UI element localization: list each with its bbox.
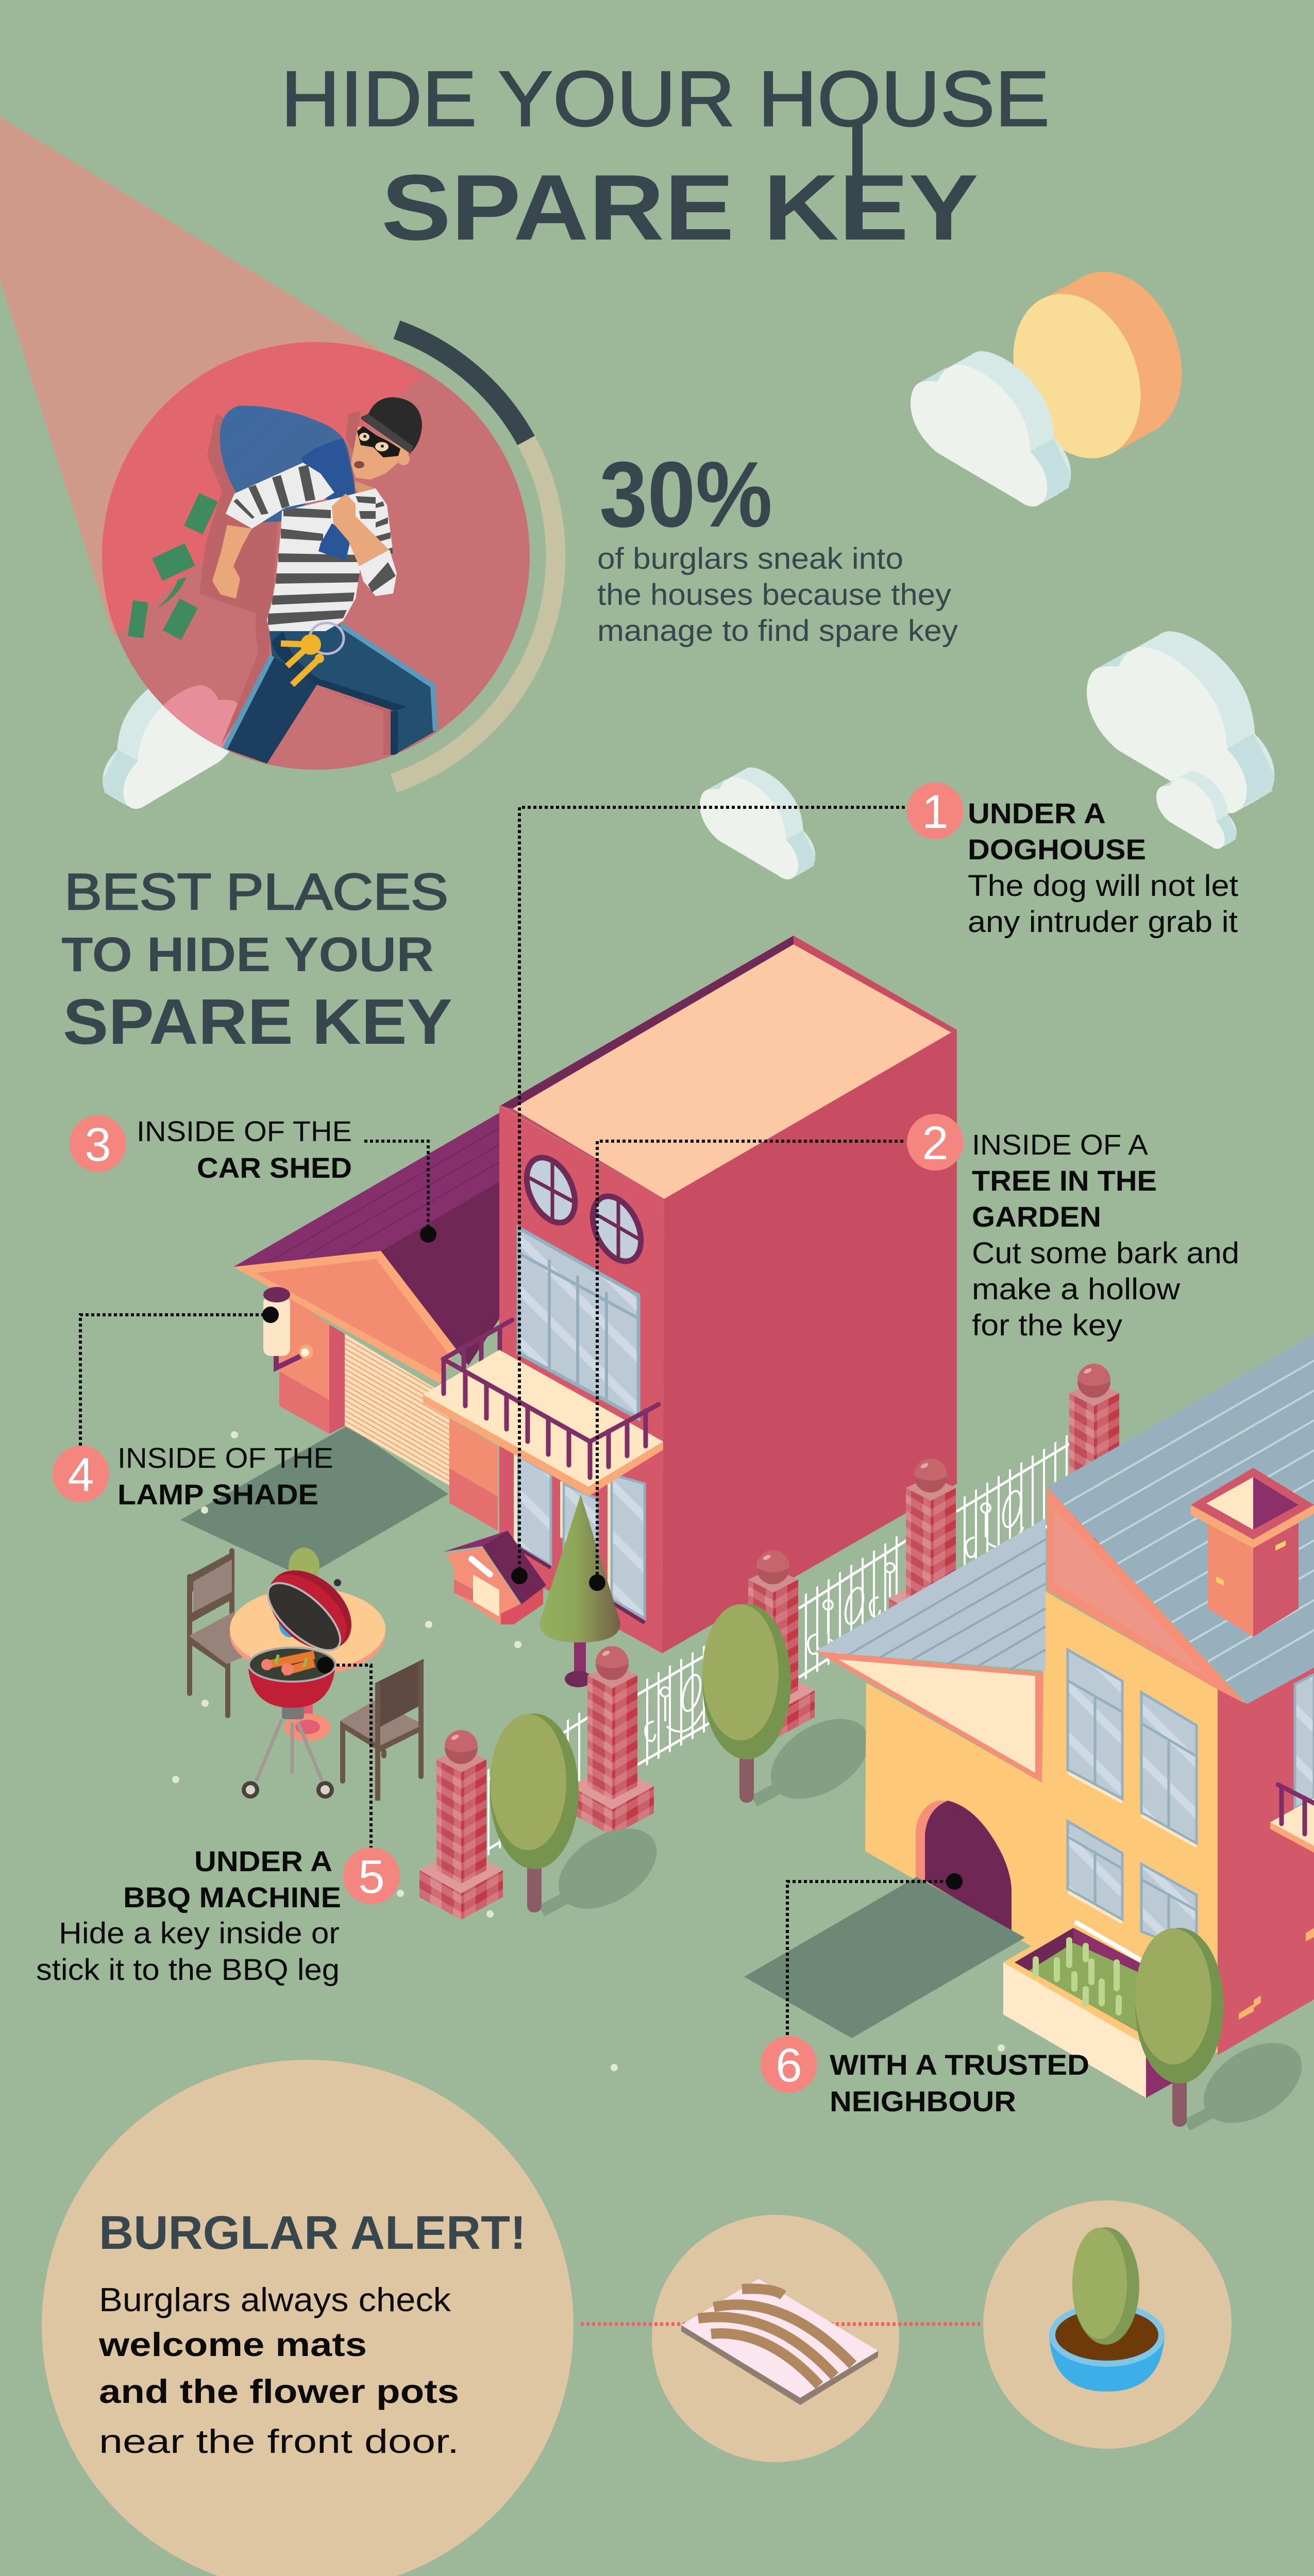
- label 2: tree: make a hollow: [972, 1273, 1181, 1306]
- label 1: doghouse: The dog will not let: [968, 869, 1238, 903]
- left arm: [212, 525, 252, 599]
- spotlight beam: [0, 117, 423, 636]
- statistic: 30 percent: manage to find spare key: [597, 614, 958, 648]
- bbq collar: [282, 1706, 304, 1719]
- shed pillar: [329, 1325, 345, 1434]
- yellow wall: [865, 1590, 1218, 2053]
- bbq bowl: [248, 1669, 335, 1708]
- label 2: tree: Cut some bark and: [972, 1236, 1239, 1270]
- pink gable: [1047, 1487, 1245, 1704]
- title: [281, 55, 1050, 260]
- bbq area: [187, 1548, 424, 1801]
- tree 2: [702, 1604, 883, 1816]
- label 3: car shed: 3: [85, 1118, 111, 1171]
- bbq wheels: [242, 1781, 334, 1799]
- label 2: tree: 2: [922, 1117, 949, 1170]
- sack neck shade: [301, 438, 356, 510]
- statistic: 30 percent: [597, 443, 958, 648]
- lower windows: [514, 1453, 645, 1623]
- left chair: [187, 1551, 242, 1716]
- label 1: doghouse: 1: [922, 786, 949, 838]
- brick post 5: [1052, 1364, 1136, 1553]
- chimney: [1191, 1468, 1314, 1637]
- sack strap: [318, 523, 352, 561]
- big pink house: [423, 936, 957, 1653]
- doorstep mat shadow: [744, 1877, 1025, 2038]
- door: [916, 1801, 1012, 1932]
- striped shirt: [267, 488, 393, 631]
- label 3: car shed: CAR SHED: [197, 1151, 352, 1184]
- label 3: car shed: [70, 1115, 352, 1184]
- heading: best places: BEST PLACES: [64, 863, 448, 920]
- window 5: [1295, 1674, 1314, 1808]
- label 4: lamp shade: [53, 1442, 333, 1511]
- cloud: under burglar circle: [103, 673, 242, 809]
- connector 1: [511, 807, 905, 1584]
- brick post 3: [731, 1550, 815, 1740]
- big blue roof: [1047, 1334, 1314, 1704]
- alert text: [98, 2281, 459, 2460]
- head: [351, 397, 422, 493]
- roof edge: [500, 936, 957, 1199]
- cloud: near sun: [911, 351, 1071, 506]
- shed roof: [233, 1113, 499, 1267]
- round window 2: [583, 1189, 650, 1269]
- brick post 4: [889, 1459, 972, 1648]
- window 2: [1141, 1692, 1197, 1846]
- fence: [487, 1432, 1072, 1856]
- label 1: doghouse: UNDER A: [968, 797, 1106, 829]
- keys: [281, 623, 344, 685]
- label 1: doghouse: [907, 783, 1238, 939]
- alert heading: BURGLAR ALERT!: [99, 2207, 526, 2259]
- label 1: doghouse: DOGHOUSE: [968, 833, 1146, 866]
- roof: [513, 944, 951, 1199]
- label 6: neighbour: [761, 2036, 1089, 2117]
- bbq legs: [256, 1719, 322, 1781]
- statistic: 30 percent: the houses because they: [597, 578, 951, 612]
- dotted link line: [581, 2323, 980, 2326]
- burglar figure: [128, 397, 435, 764]
- connector 5: [317, 1657, 371, 1849]
- label 3: car shed: INSIDE OF THE: [137, 1115, 352, 1147]
- alert text: near the front door.: [99, 2422, 459, 2460]
- decorative bricks: [1239, 1928, 1314, 2020]
- left wall: [499, 1106, 664, 1653]
- small ground dots: [172, 1431, 1005, 2071]
- small gable: [815, 1651, 1043, 1783]
- heading: best places: TO HIDE YOUR: [61, 927, 434, 982]
- label 5: bbq: UNDER A: [194, 1845, 332, 1877]
- alert text: Burglars always check: [99, 2281, 451, 2318]
- cloud: right: [1087, 631, 1274, 813]
- panel: burglar alert: [42, 2060, 574, 2576]
- shed wall base: [279, 1371, 329, 1434]
- brick post 2: [570, 1646, 654, 1836]
- label 5: bbq: Hide a key inside or: [59, 1917, 340, 1950]
- heading: best places: [61, 863, 452, 1058]
- trousers: [225, 625, 435, 764]
- label 2: tree: TREE IN THE: [972, 1164, 1157, 1197]
- label 2: tree: INSIDE OF A: [972, 1128, 1149, 1161]
- tree 1: [490, 1714, 671, 1925]
- circle: flower pot backdrop: [983, 2200, 1232, 2449]
- bbq lid: [254, 1554, 367, 1666]
- label 4: lamp shade: INSIDE OF THE: [117, 1442, 333, 1474]
- planter box: [1003, 1922, 1173, 2098]
- round window 1: [517, 1150, 584, 1230]
- label 1: doghouse: any intruder grab it: [968, 905, 1238, 939]
- label 5: bbq: BBQ MACHINE: [123, 1881, 341, 1913]
- title: SPARE KEY: [381, 156, 979, 260]
- window 1: [1068, 1650, 1122, 1802]
- label 5: bbq: [36, 1845, 400, 1987]
- icon: welcome mat: [681, 2279, 878, 2405]
- balcony: [423, 1320, 663, 1496]
- burglar circle: [102, 342, 530, 770]
- window 4: [1141, 1864, 1197, 1953]
- label 4: lamp shade: 4: [68, 1449, 94, 1501]
- cone tree: [540, 1495, 620, 1687]
- bbq grill: [249, 1648, 335, 1682]
- table: [230, 1548, 385, 1741]
- icon: flower pot: [1049, 2227, 1165, 2392]
- right chair: [340, 1659, 424, 1801]
- heading: best places: SPARE KEY: [63, 986, 452, 1058]
- doghouse: [443, 1531, 546, 1624]
- money bills: [128, 493, 218, 640]
- car shed: [233, 1113, 499, 1531]
- upper window: [518, 1228, 638, 1418]
- lamp shade: [263, 1287, 313, 1368]
- statistic: 30 percent: 30%: [599, 443, 772, 547]
- tree 3: [1135, 1928, 1314, 2140]
- cloud: right small: [1156, 771, 1237, 849]
- label 2: tree: [907, 1114, 1239, 1342]
- label 6: neighbour: NEIGHBOUR: [830, 2085, 1016, 2117]
- shed shutter: [345, 1334, 449, 1485]
- connector 6: [787, 1873, 963, 2039]
- right arm: [332, 494, 397, 596]
- label 6: neighbour: 6: [776, 2039, 802, 2092]
- shed gable: [233, 1251, 456, 1384]
- statistic: 30 percent: of burglars sneak into: [597, 542, 903, 575]
- lawn shadow near shed: [180, 1426, 448, 1578]
- sack: [220, 405, 356, 522]
- alert text: welcome mats: [98, 2326, 367, 2363]
- label 5: bbq: 5: [358, 1851, 385, 1903]
- brick post 1: [419, 1730, 503, 1920]
- yellow house: [815, 1334, 1314, 2055]
- label 5: bbq: stick it to the BBQ leg: [36, 1953, 340, 1987]
- title: HIDE YOUR HOUSE: [281, 55, 1050, 143]
- icon: sun: [991, 253, 1204, 477]
- pink wall: [1218, 1668, 1314, 2055]
- cloud: centre: [700, 768, 815, 879]
- connector 4: [80, 1307, 279, 1446]
- label 6: neighbour: WITH A TRUSTED: [830, 2048, 1089, 2081]
- left roof: [815, 1518, 1046, 1671]
- circle: welcome mat backdrop: [652, 2215, 899, 2462]
- label 2: tree: for the key: [972, 1309, 1122, 1342]
- connector 2: [589, 1141, 903, 1591]
- sleeve: [226, 463, 334, 529]
- shed wall: [279, 1288, 329, 1400]
- right wall: [662, 1030, 957, 1653]
- side balcony: [1270, 1785, 1314, 1853]
- label 2: tree: GARDEN: [972, 1200, 1101, 1233]
- alert text: and the flower pots: [99, 2372, 459, 2410]
- window 3: [1068, 1821, 1122, 1923]
- shed right section: [449, 1418, 498, 1531]
- progress ring: [394, 330, 556, 783]
- connector 3: [364, 1141, 436, 1243]
- label 4: lamp shade: LAMP SHADE: [117, 1478, 318, 1511]
